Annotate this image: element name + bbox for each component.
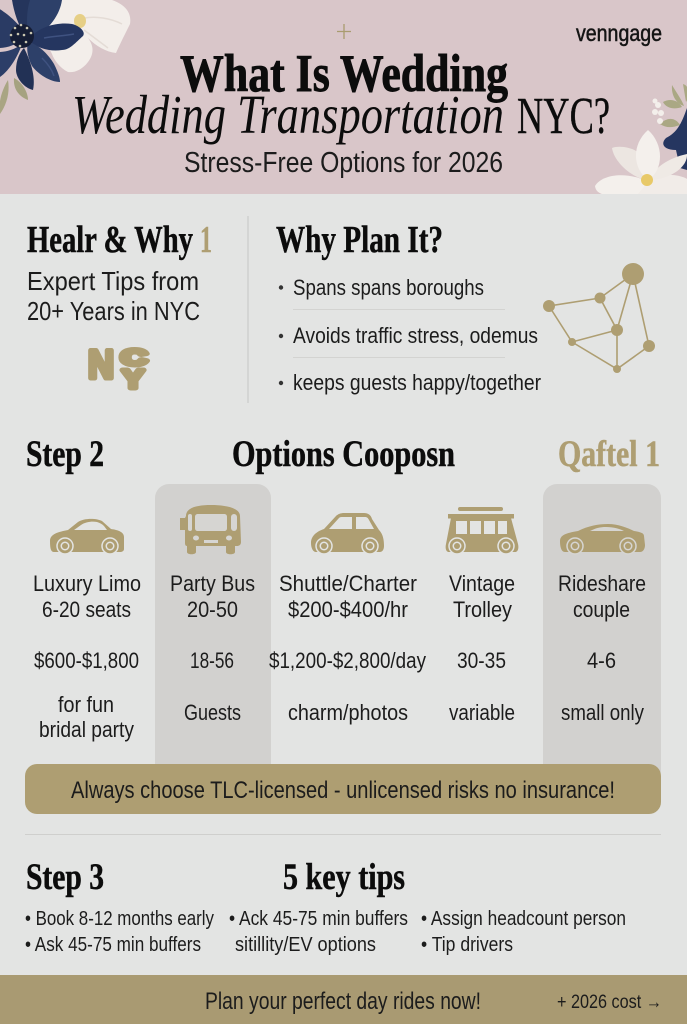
column: luxury limo: $600-$1,800 bbox=[34, 648, 139, 673]
icon: trolley bbox=[446, 507, 518, 554]
subtitle: Stress-Free Options for 2026 bbox=[184, 147, 503, 179]
column: shuttle charter: Shuttle/Charter bbox=[279, 571, 417, 596]
column: vintage trolley: variable bbox=[449, 700, 515, 725]
column: vintage trolley bbox=[446, 507, 518, 725]
tips list bbox=[25, 907, 626, 956]
footer banner bbox=[0, 975, 687, 1024]
heading: why plan it: Why Plan It? bbox=[276, 219, 443, 261]
column: shuttle charter bbox=[269, 513, 426, 725]
column: luxury limo: for fun bbox=[58, 692, 114, 717]
column: vintage trolley: Vintage bbox=[449, 571, 515, 596]
icon: NYC logo: C bbox=[121, 345, 147, 370]
column: rideshare bbox=[543, 484, 661, 784]
column: party bus bbox=[155, 484, 271, 784]
column: rideshare: small only bbox=[561, 700, 644, 725]
header banner bbox=[0, 0, 687, 196]
column: luxury limo: Luxury Limo bbox=[33, 571, 141, 596]
icon: NYC logo bbox=[88, 343, 147, 394]
bullet list: Spans spans boroughs bbox=[293, 275, 484, 300]
title line 2 suffix: NYC? bbox=[517, 88, 610, 145]
panel: why plan it bbox=[276, 219, 655, 395]
logo: venngage: venngage bbox=[576, 20, 662, 46]
column: rideshare: 4-6 bbox=[587, 648, 616, 673]
column: vintage trolley: Trolley bbox=[453, 597, 512, 622]
expert tips text: Expert Tips from bbox=[27, 266, 199, 296]
column: party bus: Guests bbox=[184, 700, 241, 725]
bullet list: keeps guests happy/together bbox=[293, 370, 541, 395]
callout: TLC licensed warning bbox=[25, 764, 661, 814]
tips list: • Ask 45-75 min buffers bbox=[25, 933, 201, 956]
bullet list bbox=[279, 275, 541, 395]
tips list: • Tip drivers bbox=[421, 933, 513, 956]
panel: healr and why bbox=[27, 219, 212, 394]
floral cluster: bottom right bbox=[595, 84, 687, 196]
panel: options comparison bbox=[25, 434, 661, 814]
icon: NYC logo: Y bbox=[122, 364, 144, 394]
heading: qaftel: Qaftel 1 bbox=[558, 434, 660, 475]
column: party bus: Party Bus bbox=[170, 571, 255, 596]
column: luxury limo: bridal party bbox=[39, 717, 134, 742]
sparkle mark bbox=[337, 24, 351, 39]
title line 1: What Is Wedding bbox=[180, 45, 508, 103]
icon: NYC logo: N bbox=[88, 343, 114, 387]
tips list: • Book 8-12 months early bbox=[25, 907, 215, 930]
title line 2: Wedding Transportation bbox=[72, 84, 504, 145]
heading: 5 key tips: 5 key tips bbox=[283, 857, 405, 898]
expert tips text: 20+ Years in NYC bbox=[27, 296, 200, 326]
icon: bus bbox=[180, 505, 241, 554]
icon: sedan bbox=[560, 524, 645, 554]
heading: options: Options Cooposn bbox=[232, 434, 455, 475]
floral cluster: top left bbox=[0, 0, 130, 114]
icon: limo car bbox=[50, 519, 124, 554]
heading number: 1 bbox=[200, 219, 212, 261]
footer call to action: Plan your perfect day rides now! bbox=[205, 988, 481, 1015]
heading: step 2: Step 2 bbox=[26, 434, 104, 475]
column: luxury limo bbox=[33, 519, 141, 742]
icon: network map bbox=[543, 263, 655, 373]
footer cost link: + 2026 cost → bbox=[557, 992, 662, 1013]
column: luxury limo: 6-20 seats bbox=[42, 597, 131, 622]
panel: key tips bbox=[25, 857, 626, 956]
expert tips text bbox=[27, 266, 200, 326]
column: shuttle charter: $1,200-$2,800/day bbox=[269, 648, 426, 673]
column: shuttle charter: $200-$400/hr bbox=[288, 597, 408, 622]
icon: shuttle car bbox=[311, 513, 384, 554]
heading: healr and why: Healr & Why bbox=[27, 219, 193, 261]
column: vintage trolley: 30-35 bbox=[457, 648, 506, 673]
column: party bus: 18-56 bbox=[190, 648, 234, 673]
tips list: • Assign headcount person bbox=[421, 907, 626, 930]
bullet list: Avoids traffic stress, odemus bbox=[293, 323, 538, 348]
column: rideshare: Rideshare bbox=[558, 571, 646, 596]
tips list: • Ack 45-75 min buffers bbox=[229, 907, 408, 930]
heading: step 3: Step 3 bbox=[26, 857, 104, 898]
column: party bus: 20-50 bbox=[187, 597, 238, 622]
column: rideshare: couple bbox=[573, 597, 630, 622]
column: shuttle charter: charm/photos bbox=[288, 700, 408, 725]
tips list: sitillity/EV options bbox=[235, 933, 376, 956]
vertical divider bbox=[248, 216, 249, 403]
